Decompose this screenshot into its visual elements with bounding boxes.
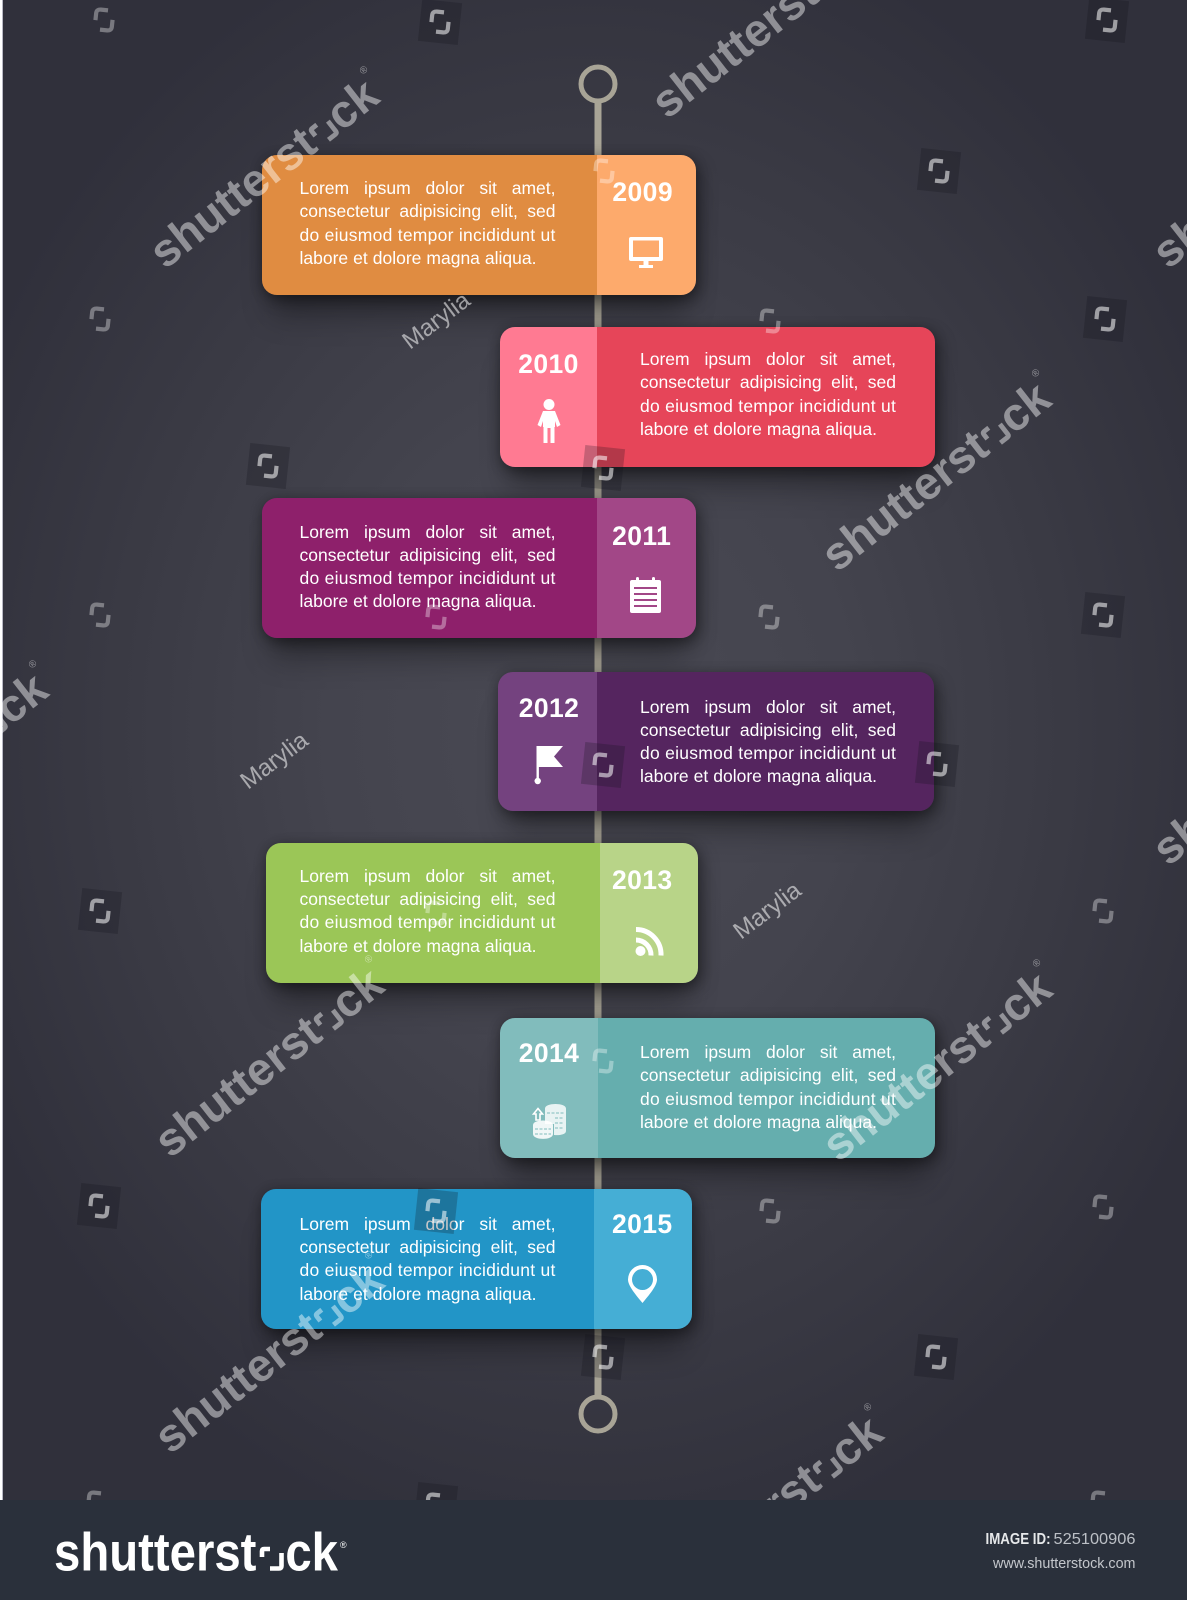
panel: 2011 bbox=[262, 498, 696, 638]
panel: 2011: 2011 bbox=[612, 521, 671, 551]
panel: 2015 bbox=[261, 1189, 692, 1329]
panel: 2012: labore et dolore magna aliqua. bbox=[640, 766, 877, 786]
panel: 2011: consectetur adipisicing elit, sed bbox=[300, 545, 556, 565]
panel: 2013: 2013 bbox=[612, 865, 673, 895]
watermark word: ® bbox=[363, 953, 376, 966]
panel: 2009 bbox=[262, 155, 696, 295]
panel: 2015: do eiusmod tempor incididunt ut bbox=[300, 1260, 556, 1280]
panel: 2015: Lorem ipsum dolor sit amet, bbox=[300, 1214, 556, 1234]
watermark word: shutterstock bbox=[139, 67, 388, 278]
panel: 2013: do eiusmod tempor incididunt ut bbox=[300, 912, 556, 932]
panel: 2013 bbox=[266, 843, 698, 983]
panel: 2014: Lorem ipsum dolor sit amet, bbox=[640, 1042, 896, 1062]
panel: 2010: 2010 bbox=[518, 349, 579, 379]
panel: 2010 bbox=[500, 327, 935, 467]
panel: 2010: Lorem ipsum dolor sit amet, bbox=[640, 349, 896, 369]
panel: 2015: consectetur adipisicing elit, sed bbox=[300, 1237, 556, 1257]
panel: 2012: 2012 bbox=[519, 693, 579, 723]
panel: 2011: do eiusmod tempor incididunt ut bbox=[300, 568, 556, 588]
panel: 2011: labore et dolore magna aliqua. bbox=[300, 591, 536, 611]
watermark word: shutterstock bbox=[144, 1252, 393, 1463]
watermark word: ® bbox=[27, 658, 40, 671]
watermark word: shutterstock bbox=[144, 956, 393, 1167]
watermark word: shutterstock bbox=[811, 370, 1060, 581]
panel: 2010: consectetur adipisicing elit, sed bbox=[640, 372, 896, 392]
panel: 2011: Lorem ipsum dolor sit amet, bbox=[300, 522, 556, 542]
footer bar bbox=[0, 1500, 1187, 1600]
watermark name: Marylia bbox=[728, 876, 807, 945]
panel: 2014: do eiusmod tempor incididunt ut bbox=[640, 1089, 896, 1109]
panel: 2013: Lorem ipsum dolor sit amet, bbox=[300, 866, 556, 886]
panel: 2010: labore et dolore magna aliqua. bbox=[640, 419, 877, 439]
panel: 2014: 2014 bbox=[519, 1038, 579, 1068]
panel: 2009: do eiusmod tempor incididunt ut bbox=[300, 225, 556, 245]
panel: 2012 bbox=[498, 672, 934, 811]
panel: 2014 bbox=[500, 1018, 935, 1158]
footer logo: shutterstock bbox=[54, 1522, 339, 1582]
panel: 2015: 2015 bbox=[612, 1209, 673, 1239]
panel: 2012: Lorem ipsum dolor sit amet, bbox=[640, 697, 896, 717]
watermark word bbox=[0, 656, 64, 872]
footer logo: ® bbox=[340, 1540, 347, 1550]
panel: 2009: 2009 bbox=[612, 177, 673, 207]
image id: 525100906 bbox=[1054, 1531, 1136, 1548]
panel: 2009: consectetur adipisicing elit, sed bbox=[300, 201, 556, 221]
site url: www.shutterstock.com bbox=[992, 1555, 1136, 1572]
watermark word: ® bbox=[363, 1249, 376, 1262]
watermark name: Marylia bbox=[397, 286, 476, 355]
panel: 2013: consectetur adipisicing elit, sed bbox=[300, 889, 556, 909]
image id: IMAGE ID: bbox=[986, 1531, 1050, 1548]
panel: 2015: labore et dolore magna aliqua. bbox=[300, 1284, 536, 1304]
watermark word: shutterstock bbox=[812, 960, 1061, 1171]
panel: 2012: consectetur adipisicing elit, sed bbox=[640, 720, 896, 740]
image id bbox=[986, 1531, 1136, 1548]
watermark word: ® bbox=[358, 64, 371, 77]
panel: 2009: labore et dolore magna aliqua. bbox=[300, 248, 536, 268]
watermark word: ® bbox=[1031, 957, 1044, 970]
panel: 2014: consectetur adipisicing elit, sed bbox=[640, 1065, 896, 1085]
panel: 2012: do eiusmod tempor incididunt ut bbox=[640, 743, 896, 763]
panel: 2010: do eiusmod tempor incididunt ut bbox=[640, 396, 896, 416]
panel: 2013: labore et dolore magna aliqua. bbox=[300, 936, 536, 956]
watermark word: ® bbox=[1030, 367, 1043, 380]
panel: 2009: Lorem ipsum dolor sit amet, bbox=[300, 178, 556, 198]
watermark word: ® bbox=[862, 1401, 875, 1414]
watermark name: Marylia bbox=[235, 726, 314, 795]
panel: 2014: labore et dolore magna aliqua. bbox=[640, 1112, 877, 1132]
